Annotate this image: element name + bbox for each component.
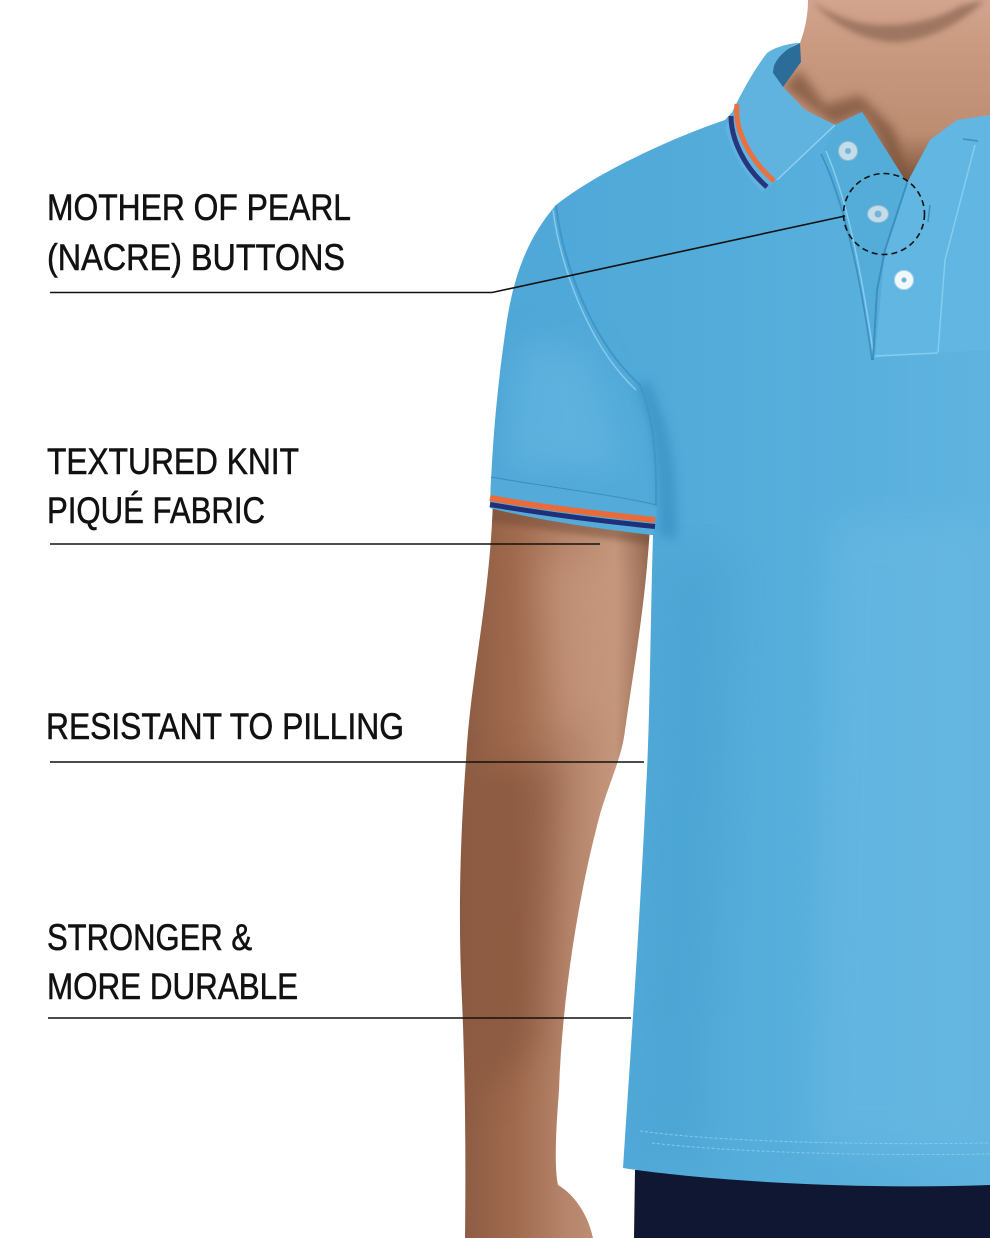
label: RESISTANT TO PILLING <box>46 706 404 747</box>
arm <box>455 500 655 1238</box>
label: MOTHER OF PEARL <box>47 187 351 228</box>
arm hair shading <box>480 760 560 1100</box>
placket stitching <box>826 145 975 358</box>
leader line <box>50 216 845 292</box>
label: PIQUÉ FABRIC <box>47 490 265 531</box>
label: STRONGER & <box>47 917 252 958</box>
callout: buttons <box>47 174 924 292</box>
hem stitching <box>640 1131 990 1155</box>
sleeve seam <box>556 205 656 505</box>
upper arm highlight <box>543 572 584 690</box>
leader line <box>50 543 600 545</box>
placket right <box>873 115 990 358</box>
callout: fabric <box>47 441 600 544</box>
sleeve cuff <box>490 477 657 535</box>
shirt shading <box>505 205 990 1155</box>
shirt body <box>490 60 990 1186</box>
button top <box>838 142 858 160</box>
button bottom <box>894 270 914 290</box>
buttonhole <box>928 139 978 222</box>
collar inside <box>773 43 801 87</box>
chin stubble <box>812 0 985 42</box>
neck <box>780 0 990 190</box>
leader line <box>48 1017 631 1019</box>
collar edge <box>777 125 835 180</box>
placket left <box>822 112 907 358</box>
label: (NACRE) BUTTONS <box>47 237 345 278</box>
callout: durable <box>47 917 631 1018</box>
collar <box>725 43 835 192</box>
label: MORE DURABLE <box>47 966 298 1007</box>
photo: model wearing polo shirt <box>455 0 990 1238</box>
leader line <box>50 761 644 763</box>
under sleeve shadow <box>492 509 650 545</box>
collar shadow on neck <box>784 68 905 170</box>
collar tipping stripes <box>731 104 774 187</box>
shorts <box>634 1170 990 1238</box>
button middle <box>868 206 888 222</box>
label: TEXTURED KNIT <box>47 441 299 482</box>
callout circle <box>844 174 924 254</box>
